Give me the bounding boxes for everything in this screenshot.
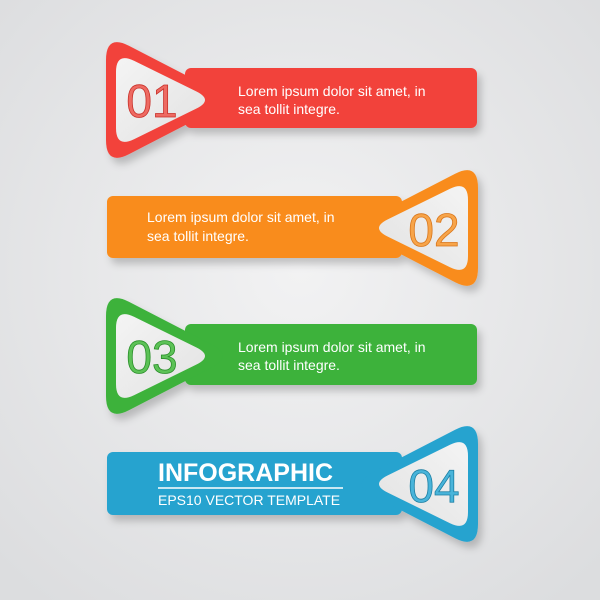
item 1: red: sea tollit integre.	[238, 101, 340, 117]
number 02: 02	[408, 204, 460, 256]
item 1: red	[106, 42, 477, 158]
title INFOGRAPHIC: INFOGRAPHIC	[158, 459, 333, 487]
triangle frame 1	[106, 42, 222, 158]
item 3: green: sea tollit integre.	[238, 357, 340, 373]
bar 3	[185, 324, 477, 385]
triangle frame 2	[362, 170, 478, 286]
number 04: 04	[408, 460, 460, 512]
triangle frame 4	[362, 426, 478, 542]
number 03: 03	[126, 331, 178, 383]
text 3: Lorem ipsum dolor sit amet, in	[238, 339, 426, 355]
text 1: Lorem ipsum dolor sit amet, in	[238, 83, 426, 99]
item 3: green	[106, 298, 477, 414]
triangle frame 3	[106, 298, 222, 414]
item 2: orange	[107, 170, 478, 286]
bar 2	[107, 196, 402, 258]
item 2: orange: sea tollit integre.	[147, 228, 249, 244]
item 4: blue	[107, 426, 478, 542]
text 2: Lorem ipsum dolor sit amet, in	[147, 209, 335, 225]
bar 4	[107, 452, 402, 515]
bar 1	[185, 68, 477, 128]
number 01: 01	[126, 75, 178, 127]
subtitle: EPS10 VECTOR TEMPLATE	[158, 492, 340, 508]
